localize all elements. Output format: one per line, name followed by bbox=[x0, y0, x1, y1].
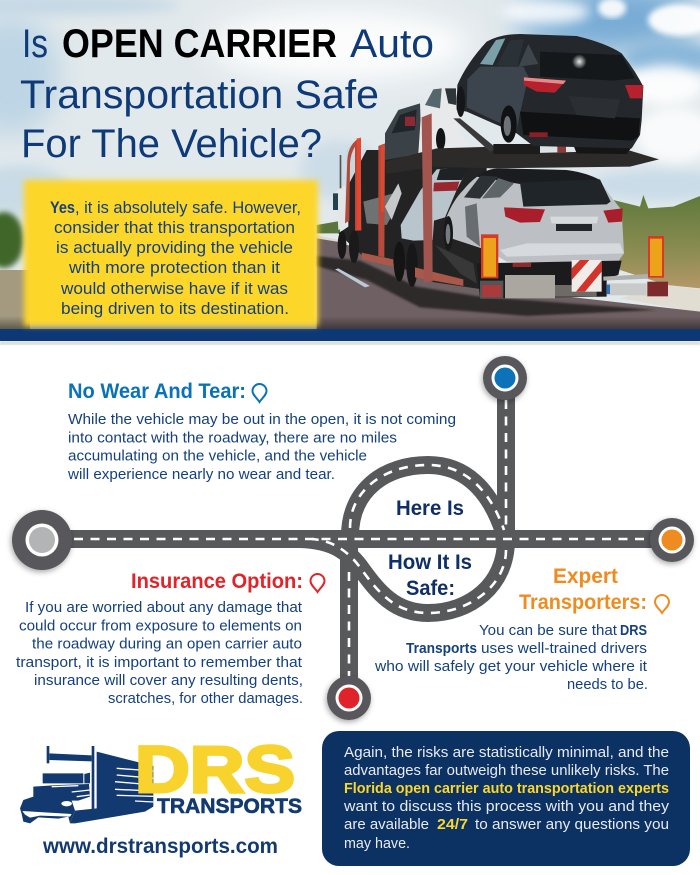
lower chassis rails bbox=[362, 245, 477, 286]
left orange marker board bbox=[481, 234, 498, 278]
body text: who will safely get your vehicle where it bbox=[374, 658, 648, 675]
body text: the roadway during an open carrier auto bbox=[32, 636, 302, 652]
body text: While the vehicle may be out in the open, it is not coming bbox=[68, 411, 456, 428]
node: blue bbox=[483, 356, 527, 400]
yellow answer callout bbox=[24, 180, 318, 326]
road surface bbox=[317, 238, 700, 330]
panel text: to answer any questions you bbox=[475, 816, 669, 833]
node: orange bbox=[650, 518, 694, 562]
panel text: want to discuss this process with you and they bbox=[343, 798, 670, 815]
body text bbox=[16, 599, 303, 707]
icon: red pin bbox=[310, 574, 324, 592]
panel text: are available bbox=[344, 816, 429, 833]
body text: could occur from exposure to elements on bbox=[19, 618, 302, 634]
upper white car bbox=[418, 88, 456, 153]
truck and cars bbox=[333, 34, 668, 299]
callout text: consider that this transportation bbox=[54, 218, 295, 237]
website: www.drstransports.com bbox=[42, 835, 278, 858]
right roadside bushes bbox=[613, 195, 700, 288]
panel background bbox=[322, 731, 690, 866]
sky through front arch bbox=[346, 144, 355, 201]
callout text: is actually providing the vehicle bbox=[56, 238, 293, 257]
title: For The Vehicle? bbox=[21, 122, 322, 166]
closing panel bbox=[322, 731, 690, 866]
body text: uses well-trained drivers bbox=[481, 640, 647, 657]
small cars behind cab bbox=[363, 183, 402, 225]
title bbox=[20, 22, 434, 166]
panel text: Florida open carrier auto transportation experts bbox=[344, 780, 669, 797]
black car on top deck bbox=[456, 34, 643, 148]
body text: Transports bbox=[406, 640, 477, 657]
truck silhouette bbox=[20, 746, 153, 823]
panel text bbox=[343, 744, 670, 852]
truck highlights and speed lines bbox=[52, 768, 153, 802]
node: grey start bbox=[12, 510, 72, 570]
wordmark TRANSPORTS: TRANSPORTS bbox=[157, 795, 302, 818]
road shoulder bbox=[620, 285, 700, 313]
panel text: advantages far outweigh these unlikely risks. The bbox=[344, 762, 669, 779]
body text: You can be sure that bbox=[479, 622, 618, 639]
callout text: would otherwise have if it was bbox=[60, 279, 288, 298]
clouds bbox=[210, 0, 700, 163]
lane marking bbox=[335, 268, 370, 287]
icon: blue pin bbox=[252, 384, 266, 402]
truck bumper and headlight bbox=[22, 801, 72, 818]
title: Is bbox=[22, 22, 48, 66]
section: no wear and tear bbox=[67, 380, 456, 483]
callout text bbox=[50, 198, 301, 318]
body text: insurance will cover any resulting dents, bbox=[34, 672, 303, 689]
section: expert transporters bbox=[374, 565, 669, 693]
heading: Transporters: bbox=[519, 591, 647, 614]
center road label bbox=[388, 497, 472, 600]
road map diagram bbox=[12, 356, 694, 720]
dark truck mass bbox=[338, 150, 487, 290]
callout text: with more protection than it bbox=[68, 258, 280, 277]
blue sky patches bbox=[0, 0, 700, 215]
body text: will experience nearly no wear and tear. bbox=[67, 466, 335, 483]
center road label: Safe: bbox=[406, 577, 455, 600]
wordmark DRS: DRS bbox=[135, 732, 295, 806]
icon: truck bbox=[20, 746, 153, 823]
center road label: Here Is bbox=[396, 497, 464, 520]
lower middle white car bbox=[400, 168, 464, 241]
heading bbox=[519, 565, 647, 614]
body text: needs to be. bbox=[567, 676, 648, 693]
title: OPEN CARRIER bbox=[62, 22, 337, 66]
body text: transport, it is important to remember that bbox=[16, 654, 303, 671]
truck shadow on road bbox=[317, 256, 657, 316]
icon: orange pin bbox=[655, 595, 669, 613]
title: Transportation Safe bbox=[20, 73, 379, 117]
body text: into contact with the roadway, there are no miles bbox=[68, 430, 397, 446]
panel text: Again, the risks are statistically minimal, and the bbox=[344, 744, 669, 761]
body text: If you are worried about any damage that bbox=[25, 599, 303, 616]
heading: Expert bbox=[553, 565, 618, 588]
panel text: 24/7 bbox=[437, 816, 468, 833]
upper dark car bbox=[385, 103, 422, 160]
tractor cab bbox=[333, 155, 359, 263]
body text: scratches, for other damages. bbox=[108, 690, 303, 707]
body text bbox=[374, 622, 648, 693]
center road label: How It Is bbox=[388, 551, 472, 574]
red stanchions bbox=[345, 113, 433, 283]
callout text: , it is absolutely safe. However, bbox=[75, 198, 301, 217]
lane dashes bbox=[74, 400, 652, 676]
distant trees bbox=[317, 221, 340, 233]
truck mid section, in detail-crop coordinates bbox=[333, 140, 487, 290]
left roadside trees bbox=[0, 212, 24, 268]
silver car on lower deck bbox=[444, 168, 624, 298]
rear frame and bumper bbox=[480, 274, 668, 299]
callout text: Yes bbox=[50, 198, 75, 217]
logo: DRS Transports bbox=[20, 732, 302, 858]
striped warning panel bbox=[572, 260, 602, 292]
hero photo: truck on highway bbox=[0, 0, 700, 330]
trailer decks bbox=[385, 118, 659, 174]
navy divider band bbox=[0, 329, 700, 345]
body text: DRS bbox=[620, 622, 647, 639]
trailer wheels bbox=[394, 242, 418, 287]
road surfaces bbox=[42, 378, 672, 698]
title: Auto bbox=[350, 22, 434, 66]
panel text: may have. bbox=[344, 835, 410, 852]
body text bbox=[67, 411, 456, 483]
lower fade bbox=[0, 318, 700, 329]
sky bbox=[0, 0, 700, 329]
body text: accumulating on the vehicle, and the vehicle bbox=[68, 448, 367, 464]
heading: Insurance Option: bbox=[131, 570, 303, 593]
callout background bbox=[24, 180, 318, 326]
callout text: being driven to its destination. bbox=[61, 299, 289, 318]
heading: No Wear And Tear: bbox=[68, 380, 246, 403]
node: red bbox=[327, 676, 371, 720]
section: insurance option bbox=[16, 570, 324, 707]
right orange marker board bbox=[648, 236, 664, 278]
